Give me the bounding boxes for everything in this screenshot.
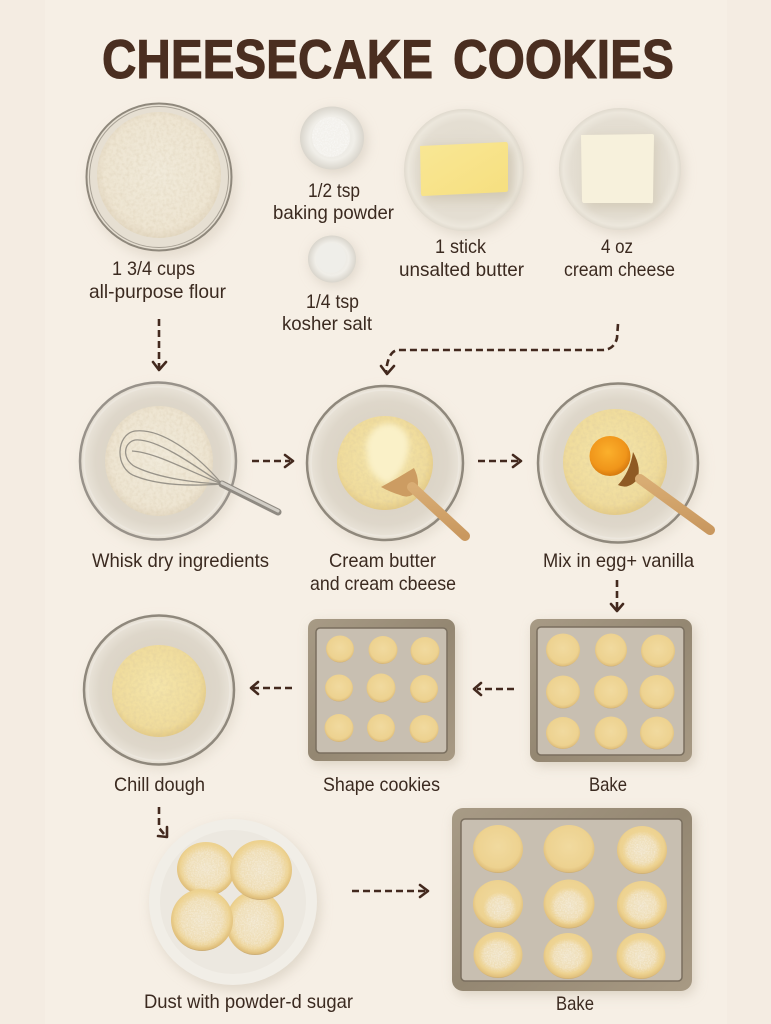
label: cream butter (310, 550, 456, 595)
icon: tray with shaped cookies (308, 619, 458, 765)
panel: shape cookies (308, 619, 458, 796)
label: baking powder (273, 180, 394, 224)
icon: bowl with dough ball (84, 616, 238, 770)
title (102, 28, 674, 90)
label: kosher salt: kosher salt (282, 313, 373, 335)
icon: bowl with creamed butter and spoon (307, 386, 467, 546)
panel: whisk dry ingredients (80, 382, 278, 572)
panel: chill dough (84, 616, 238, 796)
label: chill dough: Chill dough (114, 774, 205, 796)
arrow: flour to whisk (153, 319, 166, 370)
label: kosher salt (282, 291, 373, 335)
label: butter (399, 236, 524, 281)
label: cream butter: Cream butter (329, 550, 436, 572)
icon: bowl with flour and whisk (80, 382, 278, 545)
arrow: shape to chill (251, 682, 292, 694)
icon: plate with dusted cookies (149, 819, 320, 990)
icon: baking tray with nine cookies (530, 619, 695, 766)
icon: cream cheese on plate (559, 108, 684, 234)
label: flour: all-purpose flour (89, 281, 226, 303)
icon: bowl with batter, egg and spoon (538, 384, 710, 548)
arrow: bake to shape (474, 683, 514, 695)
icon: large tray with finished cookies (452, 808, 695, 995)
label: flour (89, 258, 226, 303)
panel: mix in egg and vanilla (538, 384, 710, 572)
panel: baking powder (273, 106, 394, 224)
panel: bake final tray (452, 808, 695, 1015)
arrow: chill to dust (158, 807, 167, 837)
label: bake final: Bake (556, 993, 594, 1015)
label: baking powder: 1/2 tsp (308, 180, 360, 202)
panel: bake tray small (530, 619, 695, 796)
arrow: egg to tray (611, 580, 623, 611)
icon: salt dish (308, 236, 358, 286)
arrow: cream cheese to cream butter (381, 324, 618, 374)
icon: flour bowl (86, 104, 232, 250)
title: COOKIES (453, 28, 674, 90)
panel: cream cheese (559, 108, 684, 281)
label: cream cheese (564, 236, 675, 281)
label: whisk dry ingredients: Whisk dry ingredients (92, 550, 269, 572)
arrow: dust to final tray (352, 885, 428, 897)
label: shape cookies: Shape cookies (323, 774, 440, 796)
label: cream cheese: 4 oz (601, 236, 633, 258)
panel: cream butter and cream cheese (307, 386, 467, 595)
label: kosher salt: 1/4 tsp (306, 291, 359, 313)
icon: butter on plate (404, 109, 527, 235)
icon: baking powder dish (300, 106, 367, 174)
label: butter: unsalted butter (399, 259, 524, 281)
panel: flour ingredient (86, 104, 237, 303)
label: flour: 1 3/4 cups (112, 258, 195, 280)
label: cream cheese: cream cheese (564, 259, 675, 281)
label: baking powder: baking powder (273, 202, 394, 224)
panel: kosher salt (282, 236, 373, 335)
panel: butter (399, 109, 527, 281)
label: butter: 1 stick (435, 236, 486, 258)
arrow: cream to egg (478, 455, 521, 467)
title: CHEESECAKE (102, 28, 433, 90)
label: cream butter: and cream cbeese (310, 573, 456, 595)
panel: dust with powdered sugar (144, 819, 353, 1013)
arrow: whisk to cream (252, 455, 293, 467)
label: bake: Bake (589, 774, 627, 796)
label: mix in egg and vanilla: Mix in egg+ vanilla (543, 550, 694, 572)
label: dust with powdered sugar: Dust with powder-d sugar (144, 991, 353, 1013)
